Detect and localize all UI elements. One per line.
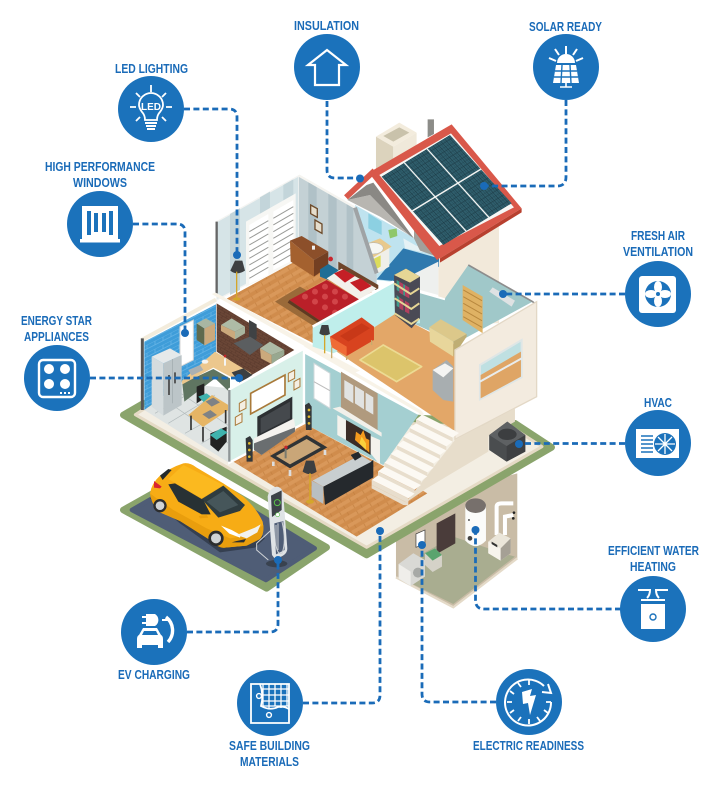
connector lines	[90, 100, 625, 703]
lower floor rooms	[229, 345, 515, 537]
callout: LED lighting	[115, 61, 188, 142]
upper floor rooms	[212, 176, 535, 430]
electric car	[150, 463, 265, 552]
callout: energy star appliances: APPLIANCES	[24, 329, 89, 344]
rug	[360, 345, 422, 382]
living floor	[233, 423, 427, 537]
bedroom left wall	[217, 176, 299, 300]
driveway pad	[123, 471, 327, 588]
vent pipe	[428, 119, 434, 137]
callout: energy star appliances	[21, 313, 92, 411]
callout: high performance windows: WINDOWS	[73, 175, 127, 190]
closet	[246, 193, 296, 287]
wall air unit	[489, 287, 515, 307]
callout: HVAC	[625, 395, 691, 476]
chairs	[197, 383, 213, 403]
callout: insulation	[294, 18, 360, 100]
water heater tank	[465, 498, 486, 546]
living floor lamp	[303, 461, 317, 504]
small lamp	[319, 325, 330, 353]
picture frames	[311, 205, 322, 233]
basement	[396, 473, 517, 607]
upper tower, chimney and roof	[376, 119, 499, 323]
floor lamp	[230, 261, 245, 301]
wall art	[235, 370, 300, 425]
living room back wall	[413, 265, 533, 343]
house illustration	[123, 119, 552, 607]
storage bin	[425, 548, 442, 572]
connector: electric readiness	[422, 545, 496, 702]
solar panels	[382, 135, 512, 245]
stairs	[372, 415, 459, 505]
connector: efficient water heating	[476, 530, 621, 609]
kitchen floor	[144, 383, 230, 463]
icon: fan	[639, 276, 676, 313]
connector: fresh air ventilation	[503, 293, 625, 295]
roof	[346, 124, 522, 263]
upper cabinets	[197, 318, 284, 364]
connector: LED lighting	[184, 109, 237, 255]
callout: EV charging: EV CHARGING	[118, 667, 190, 682]
door	[437, 513, 455, 554]
charging station	[257, 487, 287, 567]
icon: LED bulb: LED	[141, 102, 161, 113]
red sofa	[330, 317, 374, 360]
callout: solar ready	[529, 19, 602, 100]
icon: water heater	[638, 590, 668, 629]
icon: solar panel with sun	[549, 46, 583, 87]
callout: safe building materials: MATERIALS	[240, 754, 299, 769]
living room right wall	[304, 353, 418, 465]
bookshelf	[394, 269, 420, 328]
callout: high performance windows: HIGH PERFORMANCE	[45, 159, 155, 174]
stove top	[232, 368, 252, 383]
kitchen window	[180, 320, 193, 367]
sofa and lamp	[303, 452, 373, 505]
connector: solar ready	[484, 100, 566, 186]
dining table	[188, 395, 228, 442]
kitchen blue wall	[144, 304, 216, 410]
refrigerator	[152, 348, 182, 416]
washer	[399, 553, 425, 586]
fireplace	[333, 372, 382, 465]
icon: house	[308, 50, 346, 85]
lower cabinets	[182, 369, 230, 402]
callout: electric readiness: ELECTRIC READINESS	[473, 738, 584, 753]
callout: efficient water heating	[608, 543, 699, 642]
sofa	[312, 452, 373, 505]
counter	[182, 352, 252, 384]
electrical panel	[416, 530, 425, 547]
chimney	[376, 123, 417, 177]
stair side wall	[405, 408, 515, 503]
kitchen brown wall	[217, 303, 294, 375]
callout: fresh air ventilation	[623, 228, 693, 327]
cyan partition wall	[313, 282, 420, 353]
upper right wall	[433, 302, 537, 439]
callout: fresh air ventilation: VENTILATION	[623, 244, 693, 259]
connector: EV charging	[187, 560, 278, 632]
boiler	[488, 503, 515, 561]
bathroom	[355, 205, 439, 282]
outdoor air conditioner	[489, 422, 525, 462]
callout: safe building materials: SAFE BUILDING	[229, 738, 310, 753]
icon: gauge with bolt	[505, 680, 551, 726]
stove	[433, 360, 453, 402]
kitchen	[142, 300, 294, 463]
bedside table	[320, 257, 338, 280]
coffee table	[270, 435, 327, 476]
dresser	[290, 236, 328, 277]
white fixture below bathroom	[415, 262, 438, 295]
callout: fresh air ventilation: FRESH AIR	[631, 228, 685, 243]
callout: energy star appliances: ENERGY STAR	[21, 313, 92, 328]
upper floor	[337, 314, 455, 430]
bedroom right wall	[299, 176, 377, 288]
icon: cooktop	[39, 360, 75, 397]
living window	[314, 363, 330, 408]
bed	[288, 262, 378, 325]
bedroom floor	[227, 261, 383, 350]
bathroom and gable	[347, 183, 439, 282]
callout: insulation: INSULATION	[294, 18, 359, 33]
connector: energy star appliances	[90, 377, 239, 379]
cream dresser	[429, 319, 467, 357]
icon: mesh and concrete	[251, 684, 289, 723]
connector: safe building materials	[303, 531, 380, 703]
living left wall	[229, 349, 304, 463]
speakers	[246, 403, 312, 462]
callout: electric readiness	[473, 669, 584, 753]
icon: air conditioner	[636, 429, 679, 458]
icon: plug and car	[137, 614, 173, 648]
wall window	[480, 340, 522, 399]
callout: safe building materials	[229, 670, 310, 769]
ceiling beam	[212, 293, 360, 373]
callout: HVAC: HVAC	[644, 395, 672, 410]
callout: LED lighting: LED LIGHTING	[115, 61, 188, 76]
callout: solar ready: SOLAR READY	[529, 19, 602, 34]
window blind	[463, 285, 483, 333]
connector end dots	[181, 174, 523, 564]
callout: EV charging	[118, 599, 190, 682]
icon: open window	[80, 206, 120, 242]
connector: HVAC	[519, 442, 625, 445]
gable underside	[347, 195, 409, 235]
callout: efficient water heating: HEATING	[630, 559, 676, 574]
front chair	[210, 427, 228, 452]
connector: insulation	[327, 101, 360, 178]
television	[254, 397, 296, 455]
connector: high performance windows	[133, 224, 185, 333]
tower wall	[438, 223, 499, 323]
callout: high performance windows	[45, 159, 155, 257]
range hood	[234, 320, 263, 355]
ground platform	[123, 403, 552, 555]
